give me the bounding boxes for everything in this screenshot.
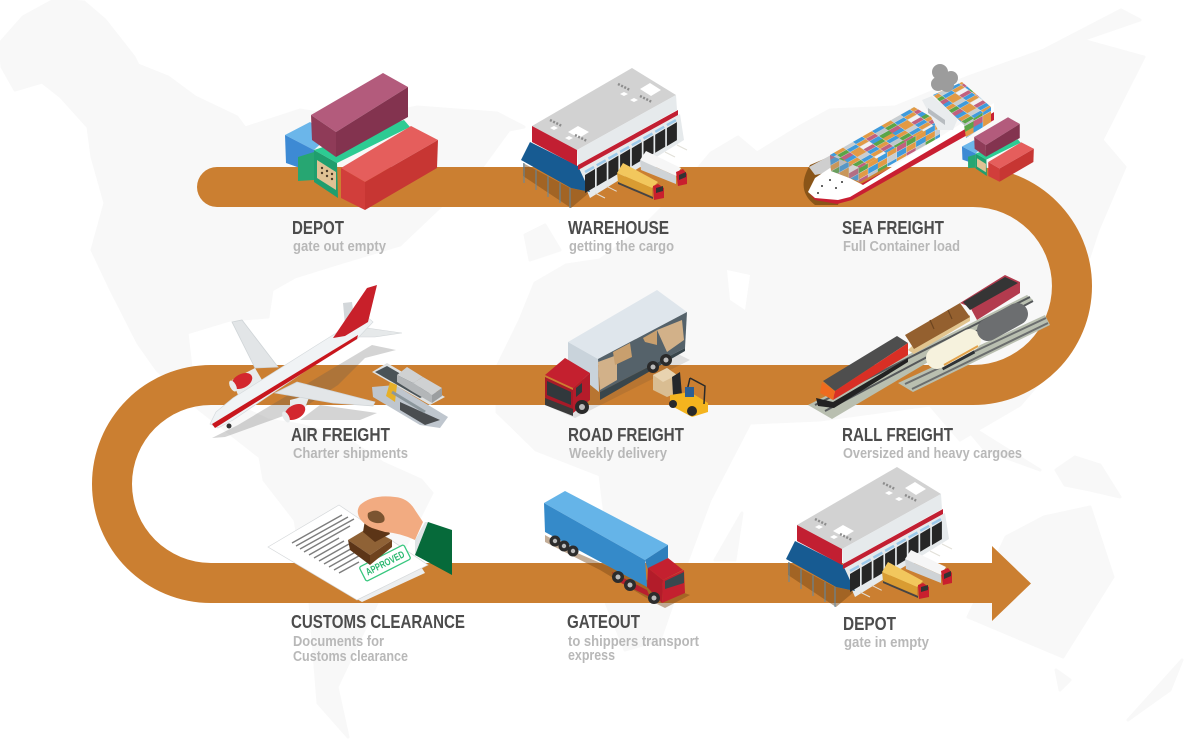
icon: forklift with pallet [653, 368, 708, 417]
icon: small containers [962, 117, 1034, 182]
step: warehouse [521, 68, 687, 255]
step: depot return [786, 467, 952, 651]
subtitle: gate in empty [844, 635, 929, 651]
heading: AIR FREIGHT [291, 425, 390, 445]
serpentine road with arrow [92, 167, 1092, 621]
approved stamp: APPROVED [364, 549, 407, 578]
subtitle: Documents for [293, 634, 384, 650]
step: rail freight [808, 275, 1050, 462]
heading: SEA FREIGHT [842, 218, 944, 238]
icon: warehouse with trucks [786, 467, 952, 607]
subtitle: getting the cargo [569, 239, 674, 255]
heading: WAREHOUSE [568, 218, 669, 238]
heading: RALL FREIGHT [842, 425, 953, 445]
heading: CUSTOMS CLEARANCE [291, 612, 465, 632]
subtitle: Charter shipments [293, 446, 408, 462]
subtitle: gate out empty [293, 239, 386, 255]
heading: DEPOT [843, 614, 896, 634]
step: customs clearance [268, 496, 465, 665]
icon: conveyor loader [372, 363, 448, 428]
icon: blue semi truck [544, 491, 690, 608]
map cut-out [727, 270, 750, 310]
subtitle: Weekly delivery [569, 446, 667, 462]
icon: open trailer truck [545, 290, 690, 418]
heading: DEPOT [292, 218, 344, 238]
heading: GATEOUT [567, 612, 640, 632]
subtitle: Full Container load [843, 239, 960, 255]
step: customs clearance: Customs clearance [293, 649, 408, 665]
icon: stacked containers [285, 73, 438, 210]
icon: freight train [808, 275, 1050, 419]
step: gateout: express [568, 648, 615, 664]
step: sea freight [804, 64, 1034, 255]
step: depot [285, 73, 438, 255]
step: road freight [545, 290, 708, 462]
step: air freight [210, 285, 448, 462]
step: gateout [544, 491, 699, 664]
smoke [931, 64, 958, 92]
subtitle: to shippers transport [568, 634, 699, 650]
icon: container ship [804, 64, 994, 205]
icon: approved document and stamp [268, 496, 452, 602]
heading: ROAD FREIGHT [568, 425, 684, 445]
icon: airplane [210, 285, 402, 438]
approved stamp [359, 545, 411, 581]
icon: warehouse with trucks [521, 68, 687, 208]
subtitle: Oversized and heavy cargoes [843, 446, 1022, 462]
